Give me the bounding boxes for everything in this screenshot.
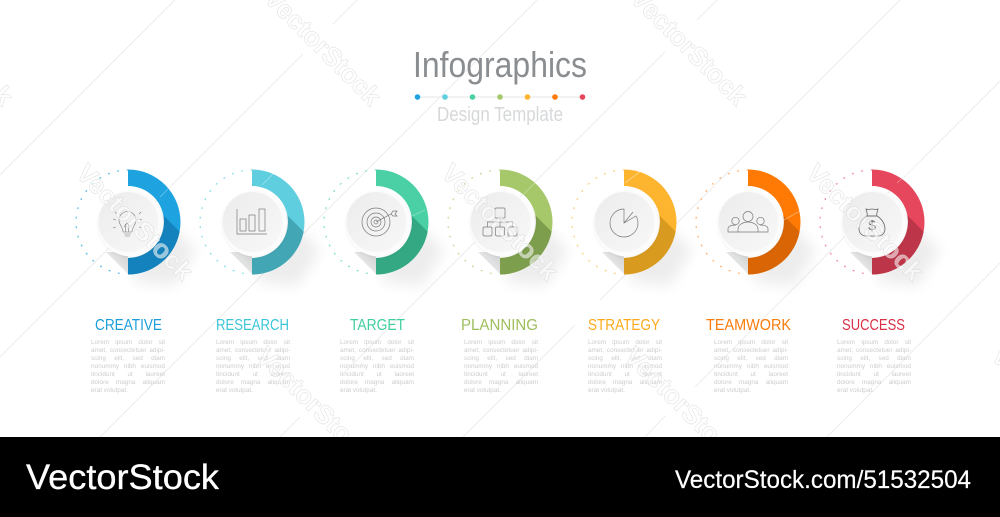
step 1: creative: [76, 170, 198, 292]
label: strategy: STRATEGY: [588, 317, 660, 334]
text block: target: erat volutpat.: [340, 387, 377, 394]
text block: research: [216, 339, 290, 394]
text block: success: tincidunt ut laoreet: [837, 371, 911, 378]
step 3: target: [324, 170, 446, 292]
text block: research: amet, consectetuer adipi-: [216, 347, 290, 354]
text block: target: Lorem ipsum dolor sit: [340, 339, 414, 346]
text block: target: nonummy nibh euismod: [340, 363, 414, 370]
text block: planning: erat volutpat.: [464, 387, 501, 394]
icon: target with arrow: [362, 208, 397, 236]
text block: strategy: Lorem ipsum dolor sit: [588, 339, 662, 346]
dotted timeline: [415, 94, 585, 100]
text block: planning: scing elit, sed diam: [464, 355, 538, 362]
text block: planning: dolore magna aliquam: [464, 379, 538, 386]
text block: research: nonummy nibh euismod: [216, 363, 290, 370]
footer brand: VectorStock: [26, 458, 220, 497]
text block: success: [837, 339, 911, 394]
text block: creative: erat volutpat.: [91, 387, 128, 394]
text block: research: tincidunt ut laoreet: [216, 371, 290, 378]
label: research: RESEARCH: [216, 317, 289, 334]
text block: teamwork: tincidunt ut laoreet: [714, 371, 788, 378]
footer image id: VectorStock.com/51532504: [675, 466, 971, 494]
footer bar: [0, 437, 1000, 517]
text block: teamwork: [714, 339, 788, 394]
label: creative: CREATIVE: [95, 317, 162, 334]
watermark overlay: VectorStock: [801, 158, 930, 287]
text block: creative: dolore magna aliquam: [91, 379, 165, 386]
text block: target: [340, 339, 414, 394]
text block: strategy: scing elit, sed diam: [588, 355, 662, 362]
text block: success: dolore magna aliquam: [837, 379, 911, 386]
text block: planning: tincidunt ut laoreet: [464, 371, 538, 378]
step 6: teamwork: [696, 170, 818, 292]
text block: strategy: [588, 339, 662, 394]
text block: success: erat volutpat.: [837, 387, 874, 394]
text block: strategy: amet, consectetuer adipi-: [588, 347, 662, 354]
icon: organisation chart: [483, 208, 517, 236]
text block: creative: [91, 339, 165, 394]
label: teamwork: TEAMWORK: [706, 317, 791, 334]
text block: teamwork: scing elit, sed diam: [714, 355, 788, 362]
text block: planning: Lorem ipsum dolor sit: [464, 339, 538, 346]
step 4: planning: [448, 170, 570, 292]
text block: success: amet, consectetuer adipi-: [837, 347, 911, 354]
icon: team of people: [728, 212, 768, 232]
text block: strategy: dolore magna aliquam: [588, 379, 662, 386]
text block: teamwork: amet, consectetuer adipi-: [714, 347, 788, 354]
text block: strategy: tincidunt ut laoreet: [588, 371, 662, 378]
text block: teamwork: erat volutpat.: [714, 387, 751, 394]
text block: research: dolore magna aliquam: [216, 379, 290, 386]
watermark overlay: VectorStock: [251, 341, 380, 470]
step 2: research: [200, 170, 322, 292]
icon: light bulb: [113, 212, 142, 236]
label: target: TARGET: [350, 317, 405, 334]
text block: research: Lorem ipsum dolor sit: [216, 339, 290, 346]
title: Infographics: [413, 44, 587, 85]
text block: target: dolore magna aliquam: [340, 379, 414, 386]
subtitle: Design Template: [437, 104, 563, 126]
label: success: SUCCESS: [842, 317, 905, 334]
text block: creative: tincidunt ut laoreet: [91, 371, 165, 378]
text block: target: tincidunt ut laoreet: [340, 371, 414, 378]
icon: pie chart: [610, 209, 638, 237]
text block: target: scing elit, sed diam: [340, 355, 414, 362]
text block: creative: nonummy nibh euismod: [91, 363, 165, 370]
text block: strategy: nonummy nibh euismod: [588, 363, 662, 370]
text block: teamwork: Lorem ipsum dolor sit: [714, 339, 788, 346]
icon: money bag: $: [868, 217, 876, 233]
watermark overlay: VectorStock: [436, 158, 565, 287]
icon: bar chart: [237, 209, 267, 234]
text block: planning: nonummy nibh euismod: [464, 363, 538, 370]
text block: success: Lorem ipsum dolor sit: [837, 339, 911, 346]
text block: strategy: erat volutpat.: [588, 387, 625, 394]
text block: research: scing elit, sed diam: [216, 355, 290, 362]
text block: planning: amet, consectetuer adipi-: [464, 347, 538, 354]
step 7: success: [820, 164, 936, 286]
step 5: strategy: [572, 170, 694, 292]
watermark overlay: VectorStock: [619, 341, 748, 470]
text block: teamwork: dolore magna aliquam: [714, 379, 788, 386]
text block: creative: Lorem ipsum dolor sit: [91, 339, 165, 346]
text block: success: nonummy nibh euismod: [837, 363, 911, 370]
text block: target: amet, consectetuer adipi-: [340, 347, 414, 354]
text block: research: erat volutpat.: [216, 387, 253, 394]
text block: planning: [464, 339, 538, 394]
text block: creative: amet, consectetuer adipi-: [91, 347, 165, 354]
label: planning: PLANNING: [461, 317, 538, 334]
text block: creative: scing elit, sed diam: [91, 355, 165, 362]
text block: success: scing elit, sed diam: [837, 355, 911, 362]
text block: teamwork: nonummy nibh euismod: [714, 363, 788, 370]
watermark overlay: VectorStock: [71, 158, 200, 287]
